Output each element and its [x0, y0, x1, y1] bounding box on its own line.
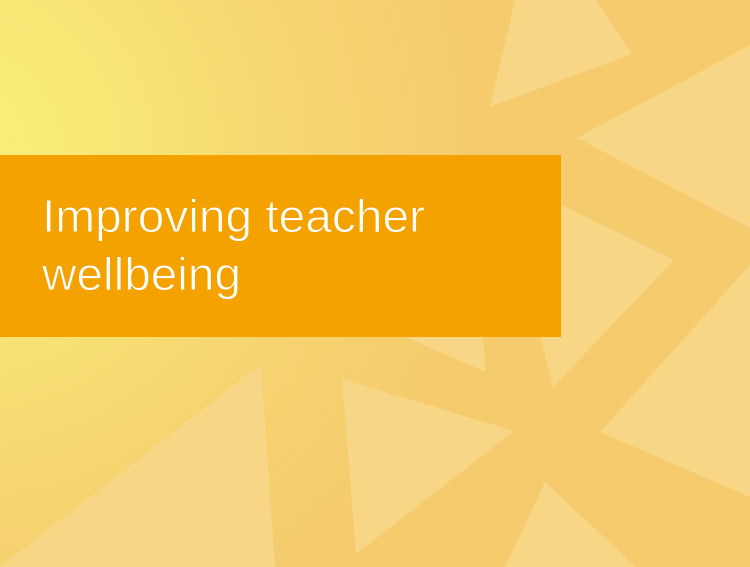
- title text: wellbeing: [41, 248, 241, 300]
- title banner: [0, 155, 561, 337]
- title text: Improving teacher: [42, 190, 425, 242]
